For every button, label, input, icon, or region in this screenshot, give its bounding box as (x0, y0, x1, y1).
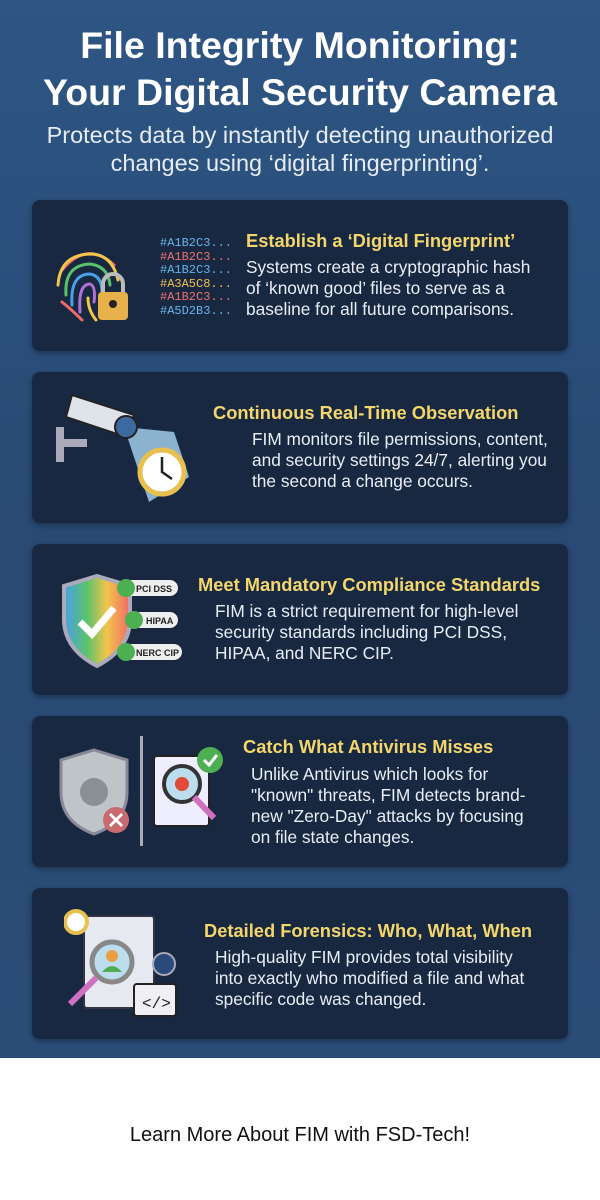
icon: shield with badges: HIPAA (146, 616, 174, 626)
body text: High-quality FIM provides total visibility (215, 947, 513, 967)
heading: Catch What Antivirus Misses (243, 736, 493, 757)
footer text: Learn More About FIM with FSD-Tech! (130, 1124, 470, 1146)
body text (251, 764, 525, 847)
body text (215, 947, 524, 1009)
heading: Establish a ‘Digital Fingerprint’ (246, 230, 515, 251)
body text: FIM monitors file permissions, content, (252, 429, 548, 449)
subtitle: changes using ‘digital fingerprinting’. (111, 150, 489, 176)
panel: compliance (32, 544, 568, 695)
body text: Unlike Antivirus which looks for (251, 764, 488, 784)
title: File Integrity Monitoring: (80, 24, 520, 66)
body text: Systems create a cryptographic hash (246, 257, 530, 277)
hash list (160, 236, 232, 318)
icon: shield with badges: PCI DSS (136, 584, 172, 594)
body text: FIM is a strict requirement for high-level (215, 601, 518, 621)
body text: specific code was changed. (215, 989, 426, 1009)
body text: new "Zero-Day" attacks by focusing (251, 806, 524, 826)
icon: fingerprint with lock (56, 252, 128, 322)
icon: shield with badges (62, 574, 182, 668)
body text: into exactly who modified a file and what (215, 968, 524, 988)
body text: security standards including PCI DSS, (215, 622, 507, 642)
body text: HIPAA, and NERC CIP. (215, 643, 394, 663)
icon: camera and clock (56, 394, 189, 502)
body text: of ‘known good’ files to serve as a (246, 278, 505, 298)
body text: the second a change occurs. (252, 471, 473, 491)
body text (215, 601, 518, 663)
subtitle: Protects data by instantly detecting unauthorized (47, 122, 553, 148)
hash list: #A5D2B3... (160, 304, 232, 318)
hash list: #A1B2C3... (160, 290, 232, 304)
body text: "known" threats, FIM detects brand- (251, 785, 525, 805)
body text (246, 257, 530, 319)
hash list: #A1B2C3... (160, 236, 232, 250)
icon: shield with badges: NERC CIP (136, 648, 179, 658)
panel: forensics (32, 888, 568, 1039)
icon: document with magnifier (64, 909, 177, 1017)
panel: real-time observation (32, 372, 568, 523)
title (43, 24, 558, 113)
body text: on file state changes. (251, 827, 414, 847)
title: Your Digital Security Camera (43, 71, 557, 113)
heading: Continuous Real-Time Observation (213, 402, 518, 423)
body text (252, 429, 548, 491)
icon: antivirus shield vs FIM magnifier (60, 736, 223, 846)
icon: document with magnifier: </> (142, 995, 171, 1013)
panel: antivirus (32, 716, 568, 867)
body text: and security settings 24/7, alerting you (252, 450, 547, 470)
body text: baseline for all future comparisons. (246, 299, 514, 319)
subtitle (47, 122, 553, 176)
heading: Detailed Forensics: Who, What, When (204, 920, 532, 941)
hash list: #A1B2C3... (160, 263, 232, 277)
panel: digital fingerprint (32, 200, 568, 351)
hash list: #A1B2C3... (160, 250, 232, 264)
heading: Meet Mandatory Compliance Standards (198, 574, 540, 595)
hash list: #A3A5C8... (160, 276, 232, 290)
